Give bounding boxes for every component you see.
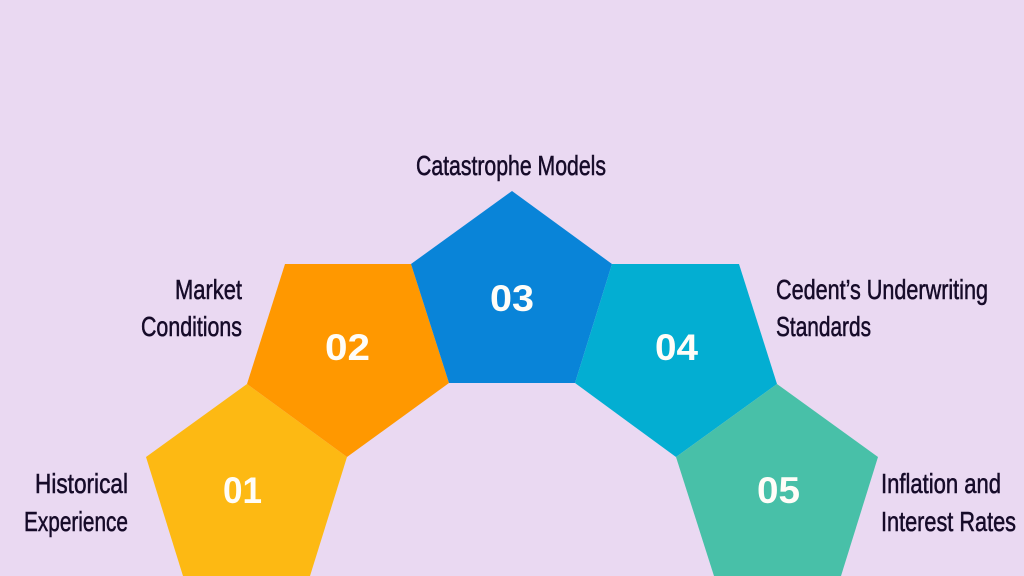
- panel: step 01 Historical Experience: Historical: [35, 468, 128, 499]
- panel: step 04 Cedent's Underwriting Standards: 04: [655, 327, 698, 368]
- panel: step 03 Catastrophe Models: Catastrophe Models: [416, 150, 606, 181]
- panel: step 01 Historical Experience: 01: [223, 470, 262, 511]
- panel: step 02 Market Conditions: Conditions: [141, 311, 242, 342]
- panel: step 01 Historical Experience: Experience: [24, 506, 128, 537]
- panel: step 02 Market Conditions: 02: [325, 327, 370, 368]
- panel: step 05 Inflation and Interest Rates: 05: [757, 470, 800, 511]
- panel: step 04 Cedent's Underwriting Standards: Standards: [776, 311, 871, 342]
- panel: step 02 Market Conditions: Market: [175, 274, 242, 305]
- panel: step 03 Catastrophe Models: [411, 150, 612, 383]
- panel: step 05 Inflation and Interest Rates: [676, 384, 1016, 576]
- panel: step 03 Catastrophe Models: 03: [490, 278, 534, 319]
- panel: step 01 Historical Experience: [24, 384, 347, 576]
- panel: step 04 Cedent's Underwriting Standards: [575, 264, 988, 457]
- panel: step 02 Market Conditions: [141, 264, 449, 457]
